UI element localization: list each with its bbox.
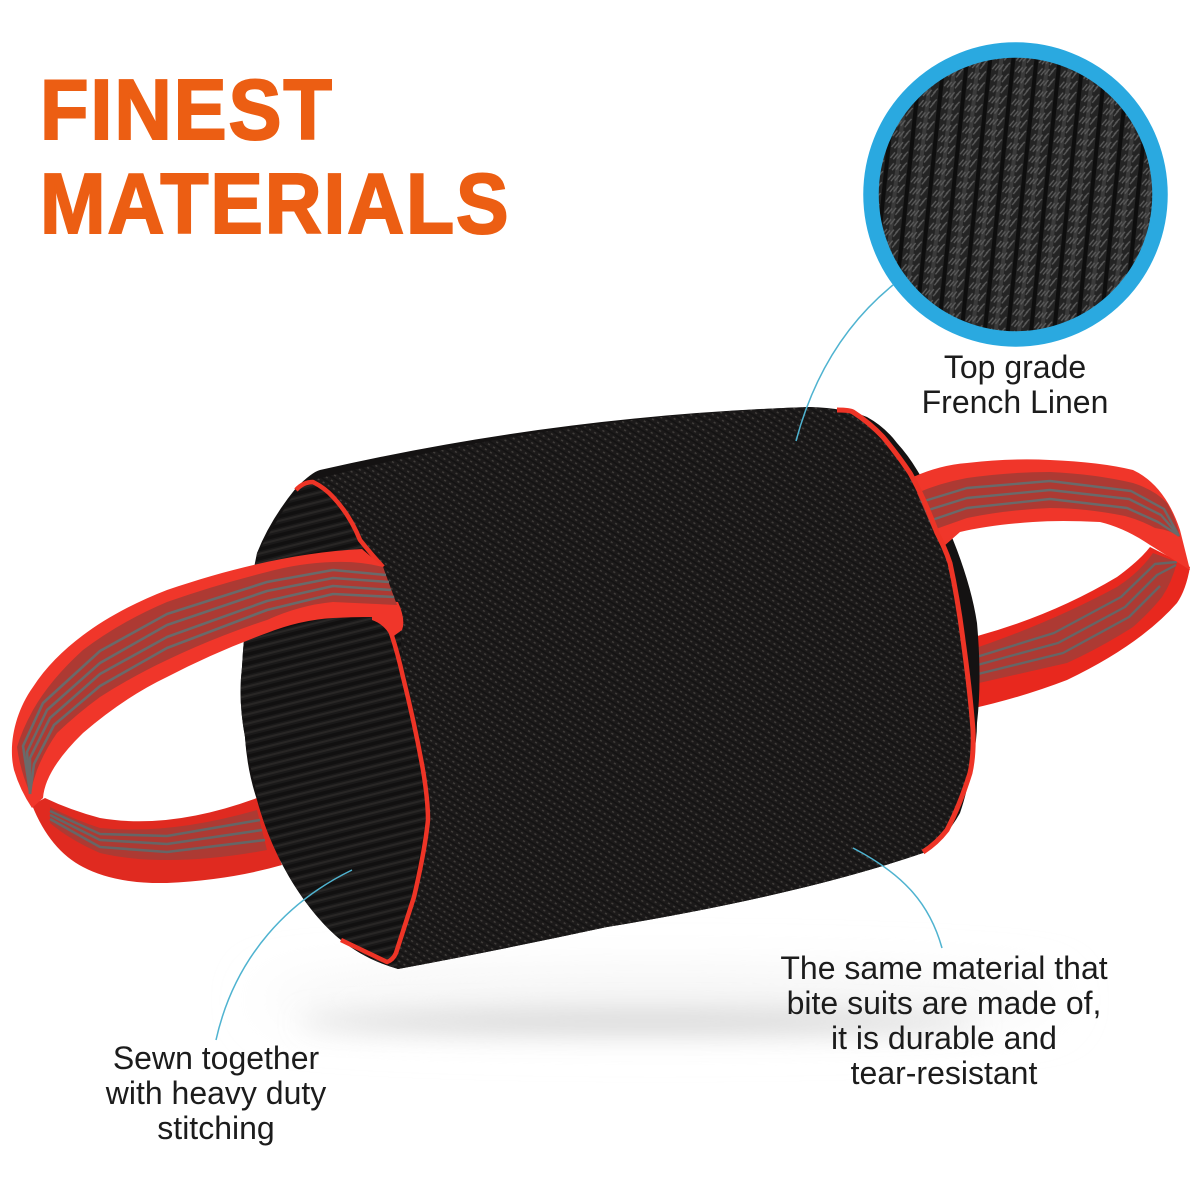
label: stitching: stitching <box>157 1110 275 1146</box>
left seam stitching <box>296 482 428 962</box>
label: stitching: with heavy duty <box>106 1075 326 1111</box>
leader line: linen <box>796 285 893 441</box>
leader line: material <box>853 848 942 948</box>
bite pad body <box>241 407 979 969</box>
label: material: bite suits are made of, <box>787 985 1101 1021</box>
label: stitching: Sewn together <box>113 1040 319 1076</box>
right strap: lower band <box>970 547 1190 709</box>
label: material: it is durable and <box>831 1020 1057 1056</box>
left strap: back band <box>32 798 282 883</box>
swatch: linen close-up <box>871 50 1160 339</box>
right seam stitching <box>837 410 973 852</box>
label: material: The same material that <box>780 950 1108 986</box>
label: material <box>780 950 1108 1091</box>
label: linen: French Linen <box>922 384 1108 420</box>
end cap fabric <box>241 480 430 969</box>
leader line: stitching <box>216 870 352 1040</box>
label: material: tear-resistant <box>851 1055 1037 1091</box>
title: FINEST <box>40 63 334 158</box>
left strap: front band <box>12 549 403 808</box>
shadow <box>260 980 1060 1031</box>
body fabric panel <box>313 407 973 969</box>
label: linen: Top grade <box>944 349 1086 385</box>
label: linen <box>922 349 1108 420</box>
right strap: upper band <box>913 459 1190 570</box>
title: MATERIALS <box>40 157 510 252</box>
label: stitching <box>106 1040 326 1146</box>
title <box>40 63 510 252</box>
